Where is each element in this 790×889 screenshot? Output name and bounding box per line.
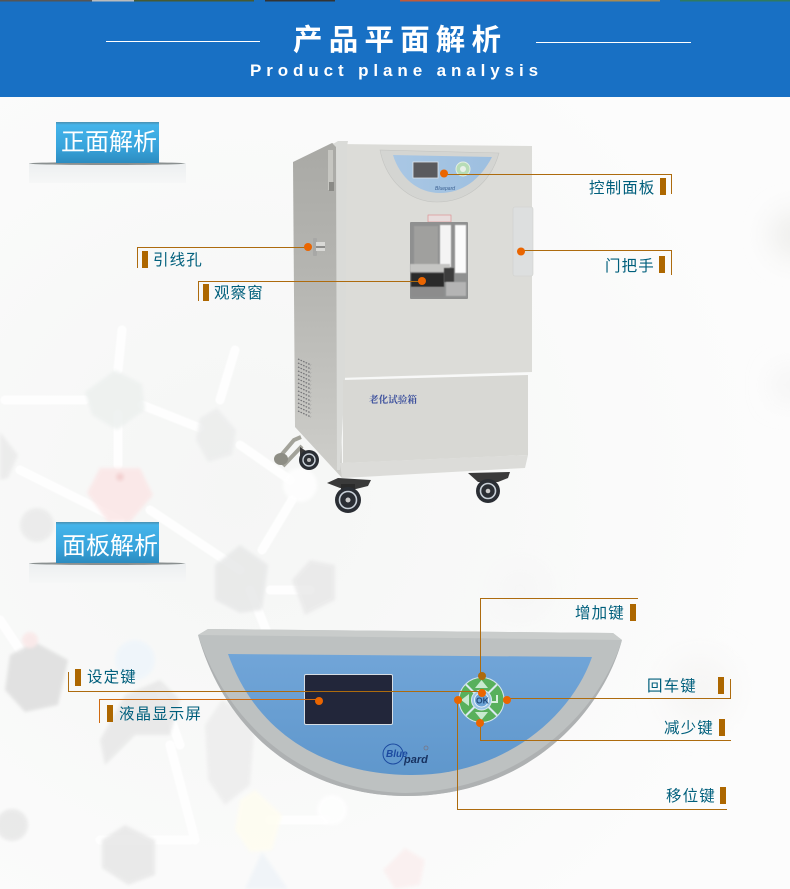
brand logo: Blue (386, 749, 408, 760)
callout: 引线孔: 引线孔 (153, 251, 203, 269)
callout: 回车键 (503, 677, 730, 704)
callout: 控制面板 (440, 170, 672, 197)
navigation keypad (459, 678, 504, 722)
callout: 液晶显示屏: 液晶显示屏 (119, 705, 202, 723)
door handle (513, 207, 533, 276)
LCD display (304, 674, 392, 724)
molecule spheres (0, 370, 425, 889)
callout: 增加键: 增加键 (575, 604, 625, 622)
callout: 减少键: 减少键 (664, 719, 714, 737)
callout: 液晶显示屏 (100, 697, 323, 723)
header band (0, 0, 790, 97)
callout: 观察窗: 观察窗 (214, 284, 264, 302)
viewing window (410, 215, 468, 299)
navigation keypad: OK (476, 696, 490, 706)
chamber label: 老化试验箱 (369, 394, 417, 406)
section button: front analysis (29, 122, 186, 183)
callout: 减少键 (476, 719, 731, 740)
brand logo (383, 744, 428, 766)
product photo: aging test chamber (274, 141, 533, 513)
control panel photo (198, 629, 622, 796)
door hinge strip (333, 141, 348, 470)
blurred background tones (496, 211, 790, 724)
front caster (327, 478, 371, 513)
mini control panel: Bluepard (435, 186, 455, 192)
title: 产品平面解析 (293, 24, 507, 57)
door (338, 144, 532, 378)
callout: 门把手 (517, 248, 672, 275)
rear caster (299, 447, 319, 470)
right caster (468, 472, 510, 503)
lower panel (343, 375, 528, 463)
callout: 设定键 (68, 668, 486, 697)
side stickers (328, 150, 334, 191)
callout: 门把手: 门把手 (605, 257, 655, 275)
molecule bonds (0, 330, 325, 840)
section button: panel analysis (29, 522, 186, 583)
brand logo: pard (403, 754, 428, 766)
top image strip (0, 0, 790, 2)
callout: 移位键: 移位键 (666, 787, 716, 805)
callout: 引线孔 (138, 243, 312, 269)
section button: panel analysis: 面板解析 (62, 533, 158, 560)
subtitle: Product plane analysis (250, 61, 543, 80)
callout: 回车键: 回车键 (647, 677, 697, 695)
chamber side (293, 143, 342, 478)
mini control panel (380, 150, 499, 202)
blue face (228, 654, 592, 775)
side vents (298, 359, 311, 417)
section button: front analysis: 正面解析 (61, 129, 157, 156)
cable port (313, 238, 325, 256)
callout: 移位键 (454, 696, 727, 810)
callout: 观察窗 (198, 277, 426, 302)
callout: 增加键 (478, 598, 638, 680)
callout: 设定键: 设定键 (87, 668, 137, 686)
lever foot (274, 437, 302, 466)
panel shell (198, 629, 622, 796)
callout: 控制面板: 控制面板 (589, 179, 655, 197)
